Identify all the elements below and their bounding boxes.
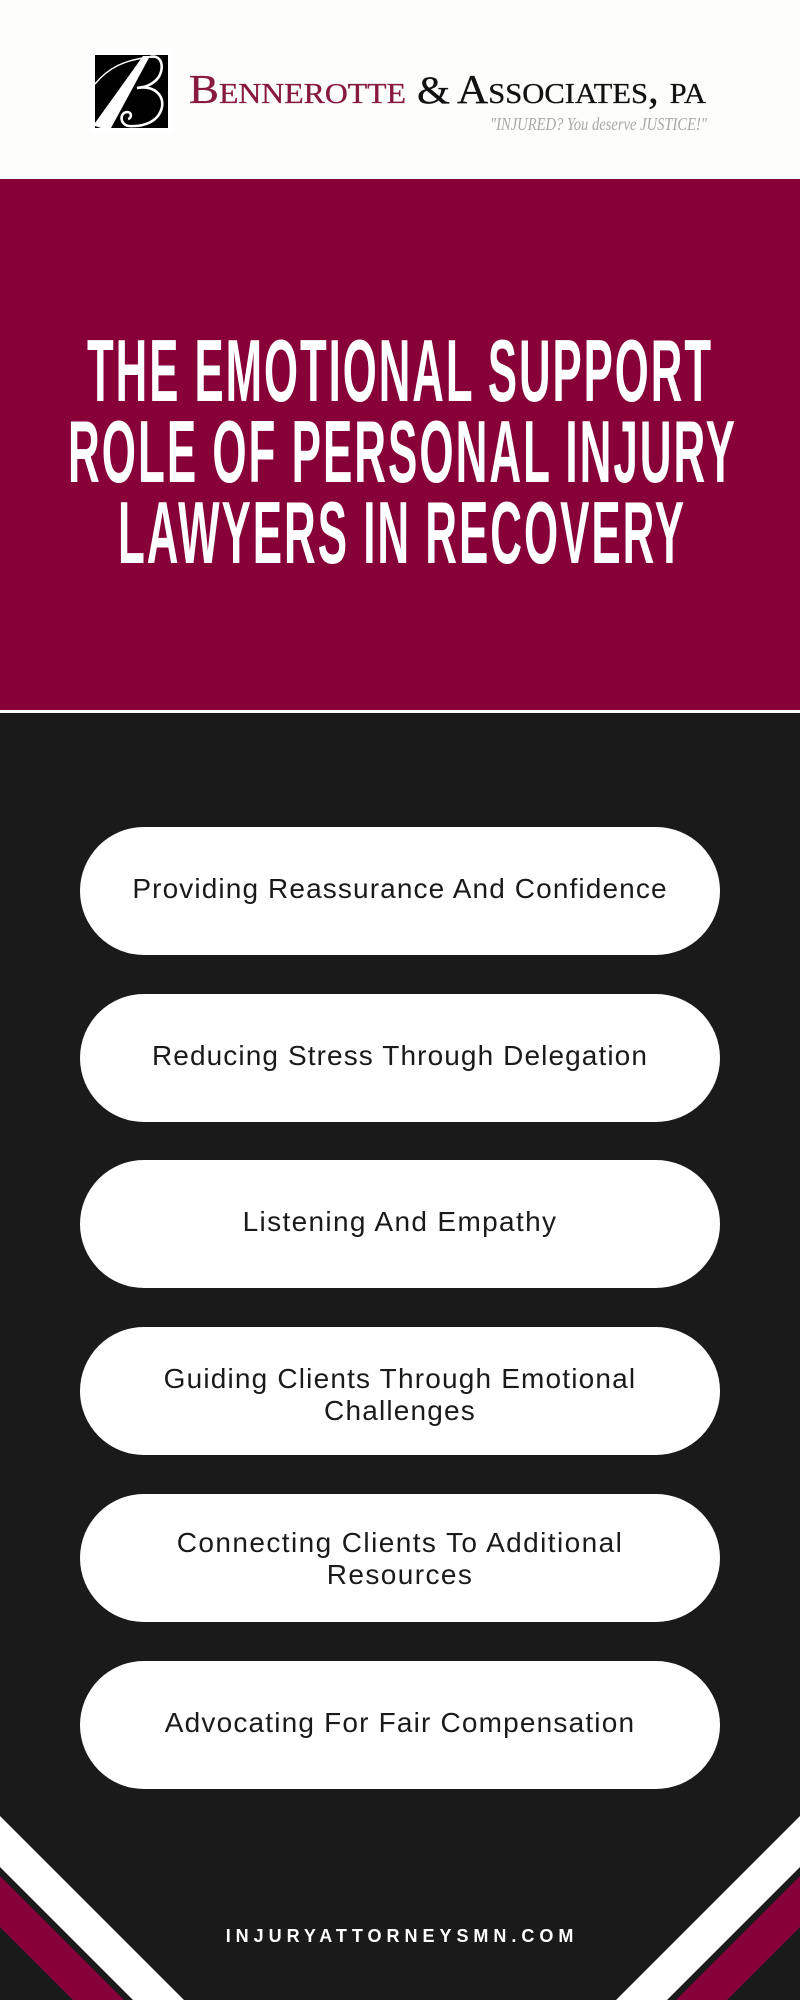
item 3 — [80, 1160, 720, 1288]
icon: monogram B — [90, 49, 173, 133]
ampersand: & — [417, 69, 450, 112]
tagline: "INJURED? You deserve JUSTICE!" — [490, 114, 707, 134]
item 2 — [80, 994, 720, 1122]
firm name continued: Associates, pa — [457, 66, 706, 112]
firm name: Bennerotte — [189, 66, 406, 112]
website footer: INJURYATTORNEYSMN.COM — [226, 1926, 578, 1946]
title — [68, 321, 737, 582]
item 6: Advocating For Fair Compensation — [165, 1706, 635, 1738]
item 1 — [80, 827, 720, 955]
item 6 — [80, 1661, 720, 1789]
item 5: Connecting Clients To Additional Resources — [177, 1526, 623, 1590]
item 2: Reducing Stress Through Delegation — [152, 1040, 648, 1070]
item 3: Listening And Empathy — [243, 1206, 557, 1236]
item 1: Providing Reassurance And Confidence — [132, 872, 668, 904]
item 5 — [80, 1494, 720, 1622]
decorative corner stripes — [0, 1816, 800, 2000]
item 4: Guiding Clients Through Emotional Challenges — [164, 1362, 636, 1426]
title panel — [0, 179, 800, 713]
header logo band — [0, 0, 800, 179]
item 4 — [80, 1327, 720, 1455]
